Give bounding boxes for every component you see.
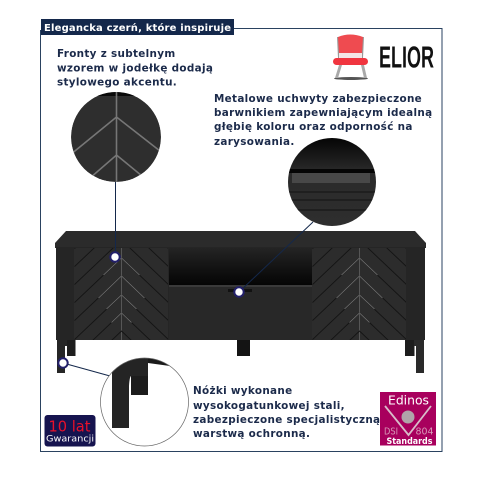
badge: Edinos standards: 804 — [416, 426, 434, 438]
badge: 10 lat warranty: Gwarancji — [46, 434, 94, 444]
text: legs: Nóżki wykonane — [193, 385, 292, 397]
legs — [57, 340, 424, 373]
badge: 10 lat warranty: 10 lat — [48, 418, 91, 436]
right door — [312, 248, 406, 340]
marker: legs — [58, 358, 68, 368]
text: legs: wysokogatunkowej stali, — [193, 400, 345, 412]
logo: Elior wordmark: ELIOR — [379, 40, 434, 74]
callout line: legs — [63, 363, 110, 376]
detail circle: handle — [288, 138, 376, 226]
title banner — [41, 19, 234, 35]
badge: Edinos standards — [380, 392, 436, 447]
logo: Elior chair — [333, 34, 368, 80]
text: handles — [214, 93, 432, 148]
TV cabinet — [55, 231, 426, 373]
text: handles: zarysowania. — [214, 136, 295, 148]
text: handles: Metalowe uchwyty zabezpieczone — [214, 93, 422, 105]
cabinet top — [55, 231, 426, 248]
badge: Edinos standards: Edinos — [388, 392, 429, 408]
frame — [40, 28, 442, 452]
cabinet body — [56, 247, 425, 340]
detail circle: leg — [100, 358, 190, 448]
badge: 10 lat warranty — [44, 415, 96, 446]
text: handles: barwnikiem zapewniającym idealną — [214, 107, 432, 119]
marker: fronts — [110, 252, 120, 262]
drawer — [169, 285, 312, 340]
text: legs: warstwą ochronną. — [193, 428, 310, 440]
open shelf — [169, 248, 312, 285]
badge: Edinos standards: Standards — [386, 437, 432, 447]
title banner: Elegancka czerń, które inspiruje — [44, 22, 231, 34]
text: fronts: wzorem w jodełkę dodają — [57, 62, 213, 74]
text: handles: głębię koloru oraz odporność na — [214, 121, 413, 133]
text: fronts: Fronty z subtelnym — [57, 48, 175, 60]
text: fronts — [57, 48, 213, 88]
text: legs: zabezpieczone specjalistyczną — [193, 414, 380, 426]
badge: Edinos standards: DSI — [384, 426, 398, 438]
left door — [74, 248, 168, 340]
detail circle: herringbone fronts — [70, 92, 162, 183]
text: fronts: stylowego akcentu. — [57, 76, 177, 88]
marker: handle — [234, 287, 244, 297]
callout line: fronts — [114, 182, 116, 257]
callout line: handle — [239, 222, 313, 292]
text: legs — [193, 385, 380, 440]
